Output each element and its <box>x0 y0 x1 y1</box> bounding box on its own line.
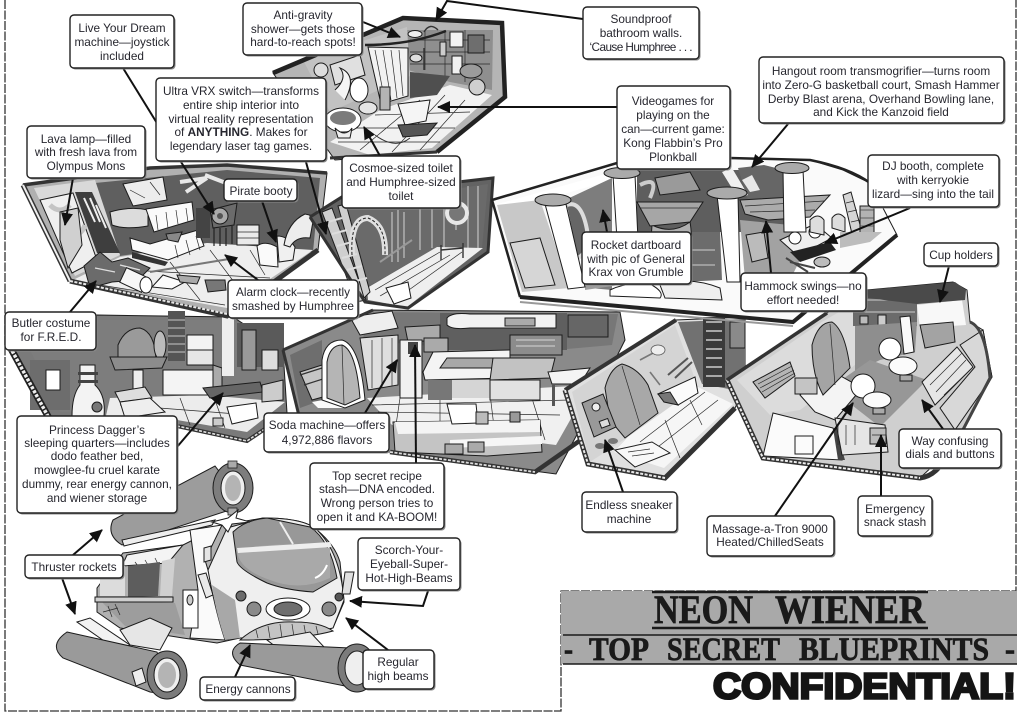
title: Neon Wiener: WIENER <box>775 587 926 632</box>
callout: alarm clock: Alarm clock—recently <box>236 285 350 299</box>
callout: soda machine: Soda machine—offers <box>269 418 385 432</box>
subtitle: top secret blueprints: - <box>1005 632 1015 668</box>
callout: emergency snack stash <box>858 496 934 538</box>
title: Neon Wiener <box>654 587 926 632</box>
callout: videogames: playing on the <box>636 108 710 122</box>
callout: dials and buttons: Way confusing <box>912 434 988 448</box>
stamp: confidential: CONFIDENTIAL! <box>713 666 1016 706</box>
callout: high beams: Hot-High-Beams <box>365 571 453 585</box>
callout: toilets: Cosmoe-sized toilet <box>349 161 454 175</box>
callout: butler costume: for F.R.E.D. <box>21 330 81 344</box>
callout: top secret recipe: stash—DNA encoded. <box>319 482 435 496</box>
callout: butler costume: Butler costume <box>12 316 91 330</box>
subtitle: top secret blueprints: - <box>564 632 573 668</box>
callout: Princess Dagger quarters: dodo feather bed, <box>51 449 143 463</box>
bottom left thruster rocket <box>56 618 187 699</box>
callout: Live Your Dream machine <box>70 15 176 70</box>
callout: Ultra VRX switch: legendary laser tag games. <box>170 139 312 153</box>
callout: Princess Dagger quarters: dummy, rear energy cannon, <box>22 477 172 491</box>
callout: Princess Dagger quarters: Princess Dagger’s <box>49 423 145 437</box>
callout: emergency snack stash: snack stash <box>864 515 926 529</box>
subtitle: top secret blueprints: TOP <box>589 632 649 668</box>
callout: DJ booth: with kerryokie <box>896 173 969 187</box>
callout: alarm clock: smashed by Humphree <box>232 299 354 313</box>
callout: Princess Dagger quarters: and wiener storage <box>47 491 148 505</box>
callout: dials and buttons: dials and buttons <box>905 447 995 461</box>
callout: hangout transmogrifier: Derby Blast arena, Overhand Bowling lane, <box>768 92 994 106</box>
callout: high beams: Scorch-Your- <box>375 543 443 557</box>
callout: pirate booty: Pirate booty <box>230 184 293 198</box>
callout: energy cannons: Energy cannons <box>205 682 291 696</box>
room: bedroom <box>23 165 327 316</box>
callout: rocket dartboard: Krax von Grumble <box>588 265 684 279</box>
room: sneaker room <box>565 317 745 478</box>
callout: thruster rockets: Thruster rockets <box>31 560 117 574</box>
callout: rocket dartboard: with pic of General <box>586 252 685 266</box>
callout: cup holders <box>924 243 1000 268</box>
callout: lava lamp: Lava lamp—filled <box>41 132 131 146</box>
callout: videogames: Kong Flabbin’s Pro <box>623 136 723 150</box>
callout: high beams <box>358 538 462 592</box>
callout: Princess Dagger quarters: mowglee-fu cruel karate <box>34 463 160 477</box>
callout: hangout transmogrifier <box>759 57 1006 124</box>
callout: anti-gravity shower <box>243 3 364 56</box>
callout: soda machine <box>264 413 390 454</box>
callout: dials and buttons <box>899 429 1002 470</box>
callout: massage seats: Heated/ChilledSeats <box>716 535 824 549</box>
callout: toilets: toilet <box>389 189 414 203</box>
callout: Ultra VRX switch <box>156 78 328 162</box>
room: Princess Dagger quarters <box>10 311 287 441</box>
room: hangout room <box>492 158 897 326</box>
callout: Live Your Dream machine: included <box>100 49 144 63</box>
callout: DJ booth: lizard—sing into the tail <box>872 187 994 201</box>
callout: massage seats: Massage-a-Tron 9000 <box>712 522 828 536</box>
callout: Ultra VRX switch: of ANYTHING. Makes for <box>174 125 308 139</box>
callout: butler costume <box>5 312 98 352</box>
callout: hangout transmogrifier: into Zero-G basketball court, Smash Hammer <box>762 78 1000 92</box>
callout: videogames: Videogames for <box>632 94 714 108</box>
callout: high beams: Eyeball-Super- <box>370 557 448 571</box>
callout: regular high beams <box>363 650 436 690</box>
callout: hangout transmogrifier: Hangout room transmogrifier—turns room <box>772 64 990 78</box>
room: ladder room <box>310 178 493 308</box>
callout: hammock swings <box>741 273 868 312</box>
callout: toilets <box>342 156 462 210</box>
bottom right thruster rocket <box>232 632 376 692</box>
callout: top secret recipe <box>310 463 446 530</box>
callout: alarm clock <box>228 280 360 320</box>
callout: Ultra VRX switch: virtual reality representation <box>169 112 313 126</box>
callout: regular high beams: high beams <box>368 669 429 683</box>
room: kitchen <box>283 310 625 474</box>
callout: lava lamp: with fresh lava from <box>34 145 137 159</box>
subtitle: top secret blueprints <box>564 632 1015 668</box>
callout: soundproof walls: Soundproof <box>610 12 672 26</box>
callout: videogames <box>617 86 732 170</box>
room: cockpit <box>727 282 992 478</box>
callout: soundproof walls: bathroom walls. <box>600 26 682 40</box>
callout: Princess Dagger quarters <box>17 416 178 514</box>
callout: cup holders: Cup holders <box>929 248 993 262</box>
room: bathroom <box>273 18 505 160</box>
title banner <box>561 587 1017 668</box>
callout: Ultra VRX switch: entire ship interior into <box>183 98 299 112</box>
callout: soundproof walls: ‘Cause Humphree . . . <box>590 40 692 54</box>
callout: top secret recipe: open it and KA-BOOM! <box>317 510 437 524</box>
callout: emergency snack stash: Emergency <box>865 502 925 516</box>
callout: rocket dartboard: Rocket dartboard <box>591 238 681 252</box>
callout: soda machine: 4,972,886 flavors <box>282 433 372 447</box>
callout: DJ booth: DJ booth, complete <box>882 159 984 173</box>
callout: lava lamp: Olympus Mons <box>47 159 125 173</box>
title: Neon Wiener: NEON <box>654 587 753 632</box>
callout: soundproof walls <box>583 7 700 60</box>
callout: endless sneaker machine: machine <box>607 512 652 526</box>
callout: regular high beams: Regular <box>377 655 419 669</box>
callout: videogames: Plonkball <box>649 150 697 164</box>
callout: anti-gravity shower: hard-to-reach spots! <box>250 35 356 49</box>
callout: rocket dartboard <box>582 232 692 286</box>
callout: DJ booth <box>868 155 1000 208</box>
callout: energy cannons <box>200 677 296 702</box>
callout: top secret recipe: Top secret recipe <box>332 469 422 483</box>
callout: lava lamp <box>27 126 146 180</box>
callout: Live Your Dream machine: machine—joystick <box>74 35 170 49</box>
callout: endless sneaker machine <box>582 492 678 534</box>
callout: Live Your Dream machine: Live Your Dream <box>78 21 166 35</box>
callout: Ultra VRX switch: Ultra VRX switch—transforms <box>163 84 319 98</box>
top thruster rocket <box>111 461 253 546</box>
ship exterior <box>56 461 376 699</box>
callout: massage seats <box>707 516 836 558</box>
callout: anti-gravity shower: shower—gets those <box>251 22 356 36</box>
callout: toilets: and Humphree-sized <box>346 175 456 189</box>
callout: hangout transmogrifier: and Kick the Kanzoid field <box>813 105 949 119</box>
subtitle: top secret blueprints: SECRET <box>667 632 780 668</box>
callout: top secret recipe: Wrong person tries to <box>321 496 434 510</box>
ship body <box>95 510 354 643</box>
callout: pirate booty <box>224 179 298 202</box>
callout: hammock swings: Hammock swings—no <box>744 279 862 293</box>
callout: anti-gravity shower: Anti-gravity <box>273 8 333 22</box>
subtitle: top secret blueprints: BLUEPRINTS <box>799 632 989 668</box>
callout: thruster rockets <box>25 555 124 580</box>
callout: videogames: can—current game: <box>621 122 725 136</box>
callout: Princess Dagger quarters: sleeping quarters—includes <box>24 436 170 450</box>
callout: hammock swings: effort needed! <box>767 293 839 307</box>
callout: endless sneaker machine: Endless sneaker <box>585 498 673 512</box>
